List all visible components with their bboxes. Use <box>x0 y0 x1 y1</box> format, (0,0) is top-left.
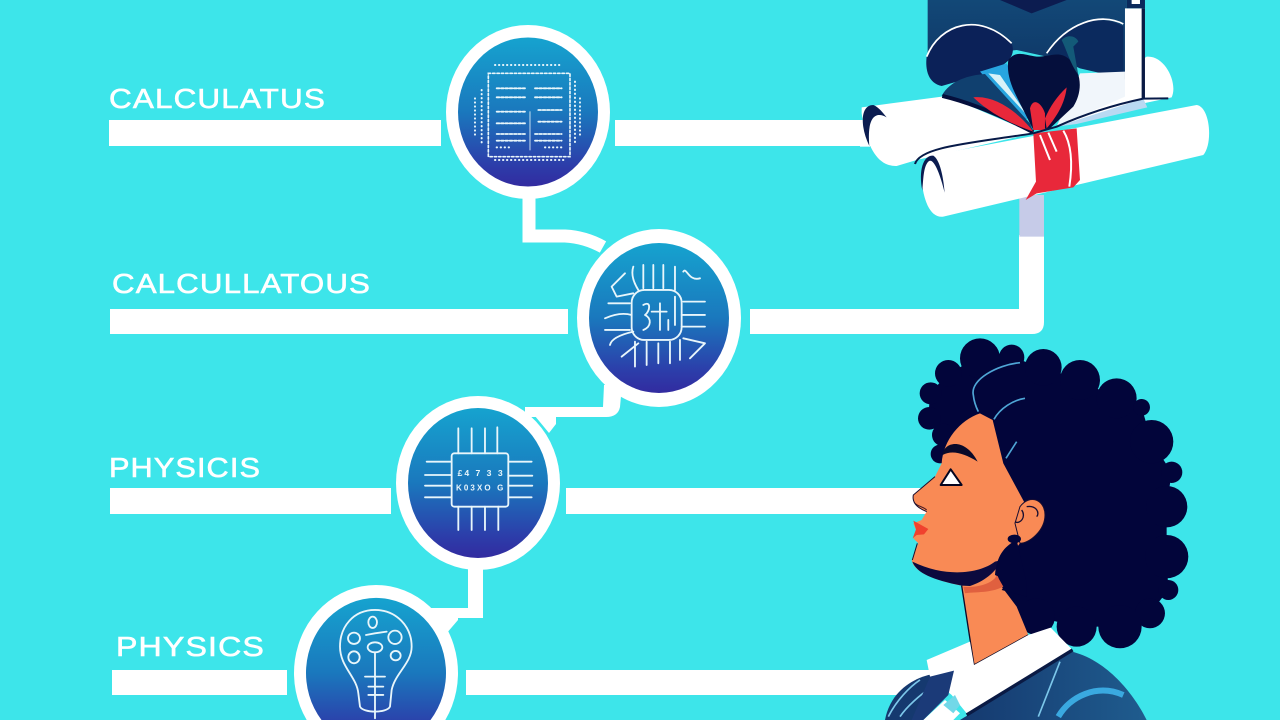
track: row 3 bars <box>110 488 926 514</box>
nostril <box>915 503 927 510</box>
icon: light bulb with circuit <box>340 610 412 718</box>
icon: pinned microchip <box>425 427 532 530</box>
icon: circuit-trace microchip <box>605 265 705 367</box>
track: row 4 bars <box>112 670 931 695</box>
label: PHYSICS: PHYSICS <box>116 631 265 662</box>
right cap lobe <box>1047 20 1123 78</box>
tie <box>912 671 954 720</box>
node 3: chip with pins <box>396 396 560 570</box>
support post <box>1019 195 1044 237</box>
red bow <box>973 87 1067 132</box>
illustration: graduation cap and diplomas <box>860 0 1209 237</box>
label: PHYSICIS: PHYSICIS <box>109 452 261 483</box>
node 1: chip with dotted grid <box>446 25 610 199</box>
pale sliver below seam <box>1057 99 1147 127</box>
blue ribbon sliver <box>980 63 1033 120</box>
left cap lobe <box>926 25 1013 86</box>
hair highlights <box>973 363 1025 458</box>
scroll curl marks <box>863 105 887 146</box>
jacket stripe <box>1058 691 1123 717</box>
jacket right <box>960 652 1147 720</box>
eye <box>941 469 962 485</box>
lips <box>913 521 928 538</box>
scroll highlight under cap <box>1057 72 1125 127</box>
hair <box>918 338 1188 648</box>
connector: node 1 to node 2 <box>529 195 603 247</box>
node 2: chip with circuit traces <box>577 229 741 407</box>
back diploma scroll <box>862 57 1173 166</box>
connector: node 2 to node 3 <box>525 385 622 433</box>
dark scroll seam <box>915 98 1168 164</box>
teal tassel tip <box>1062 36 1078 75</box>
label: CALCULLATOUS: CALCULLATOUS <box>112 268 371 299</box>
hair over neck <box>995 540 1027 597</box>
neck and face <box>912 413 1028 665</box>
dark shoulder flap <box>942 74 1033 132</box>
cap board <box>928 0 1127 80</box>
track: row 2 bars with riser to diploma <box>110 235 1044 334</box>
neck outline <box>962 586 1028 665</box>
jacket left <box>885 672 952 720</box>
cap top notch <box>1000 0 1067 13</box>
label: CALCULATUS: CALCULATUS <box>109 83 326 114</box>
front diploma scroll <box>922 105 1209 217</box>
jaw shadow <box>912 560 1002 586</box>
connector: node 3 to node 4 <box>430 560 483 634</box>
illustration: student looking up <box>885 338 1188 720</box>
node 4: light bulb <box>294 585 458 720</box>
black heart knot <box>1008 54 1080 130</box>
tassel strip <box>1125 8 1143 98</box>
red band <box>1026 128 1080 200</box>
ear <box>1015 499 1045 543</box>
collar <box>927 628 1073 713</box>
face outline <box>912 477 935 560</box>
icon: pinned microchip: K03XO G <box>456 484 503 493</box>
eyebrow <box>943 444 978 462</box>
icon: pinned microchip: £4 7 3 3 <box>458 468 503 478</box>
icon: dotted microchip <box>475 65 580 160</box>
collar shadow <box>967 650 1073 715</box>
track: row 1 bars <box>109 120 875 146</box>
